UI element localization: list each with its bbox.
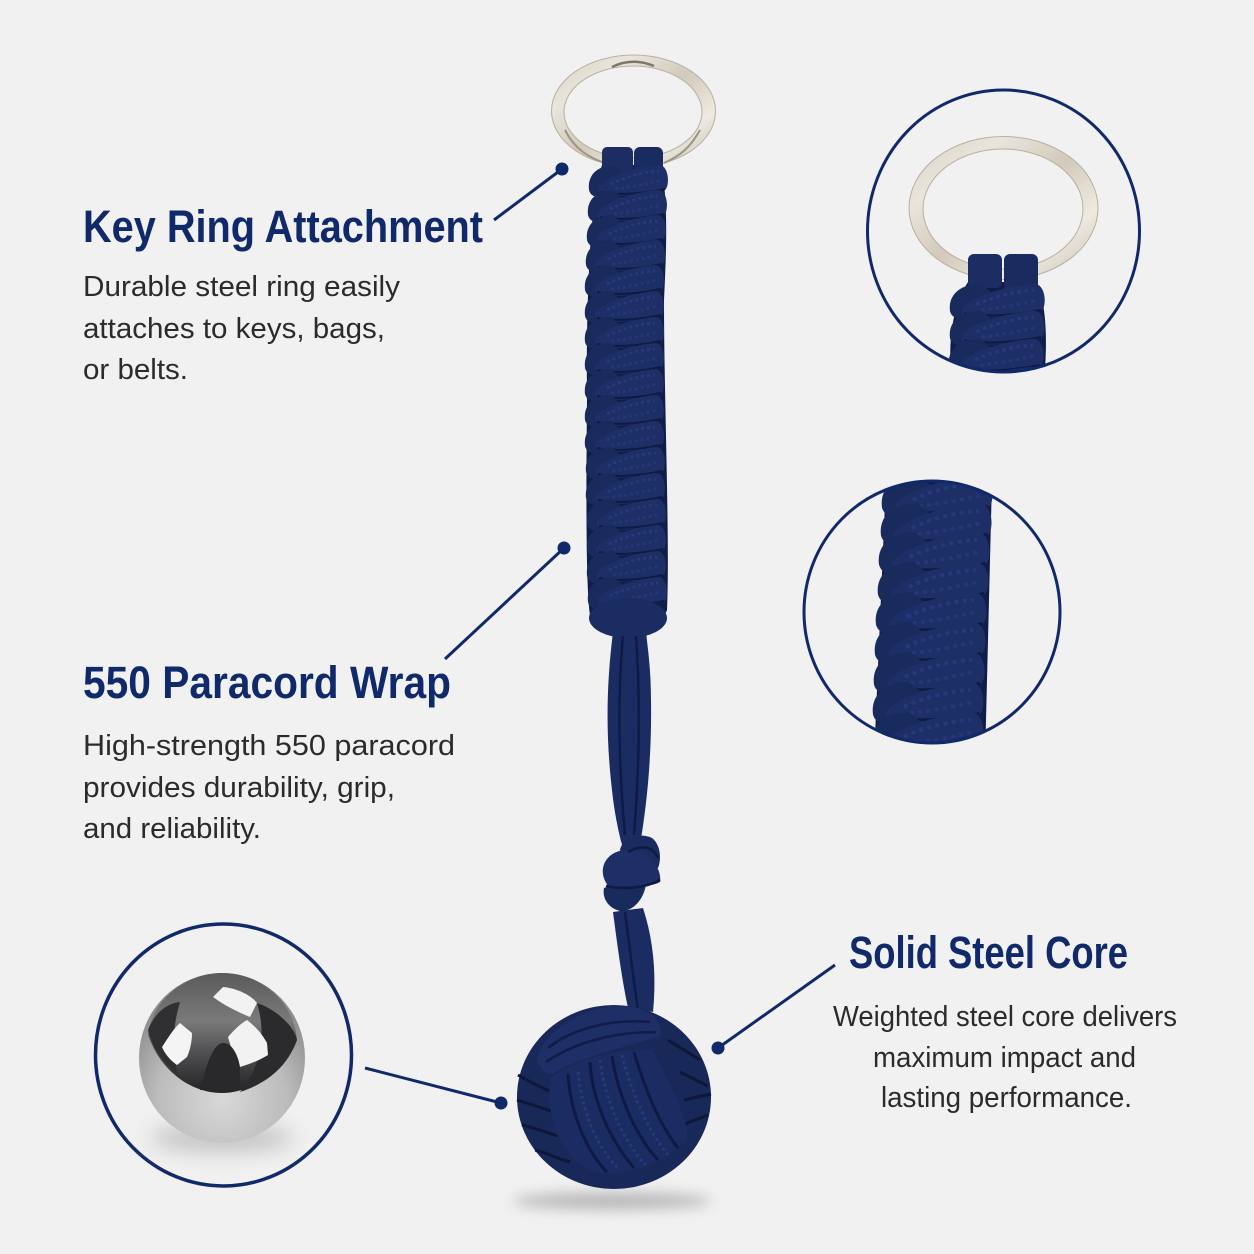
description: High-strength 550 paracord bbox=[83, 730, 455, 762]
detail circle: paracord wrap bbox=[804, 475, 1060, 760]
description: provides durability, grip, bbox=[83, 772, 395, 804]
steel ball bbox=[139, 973, 305, 1152]
callout: key ring attachment bbox=[83, 162, 568, 386]
description: lasting performance. bbox=[881, 1082, 1132, 1114]
loose cords bbox=[608, 632, 654, 1012]
callout: 550 paracord wrap bbox=[83, 542, 570, 845]
floor shadow bbox=[512, 1193, 712, 1209]
heading: Key Ring Attachment bbox=[83, 201, 483, 252]
leader line bbox=[365, 1068, 508, 1110]
description: Weighted steel core delivers bbox=[833, 1001, 1177, 1033]
heading: 550 Paracord Wrap bbox=[83, 657, 451, 708]
description: attaches to keys, bags, bbox=[83, 313, 385, 345]
detail circle: steel ball core bbox=[96, 924, 508, 1186]
braided paracord wrap bbox=[585, 147, 668, 638]
leader line bbox=[445, 542, 570, 659]
detail circle: key ring bbox=[868, 90, 1140, 402]
leader line bbox=[494, 162, 568, 220]
callout: solid steel core bbox=[712, 927, 1177, 1114]
heading: Solid Steel Core bbox=[849, 927, 1128, 978]
description: and reliability. bbox=[83, 813, 261, 845]
small knot bbox=[603, 836, 660, 911]
description: Durable steel ring easily bbox=[83, 271, 401, 303]
product: paracord keychain bbox=[512, 55, 716, 1209]
description bbox=[83, 730, 455, 845]
key ring bbox=[552, 55, 716, 167]
description: or belts. bbox=[83, 354, 188, 386]
description bbox=[83, 271, 401, 386]
description: maximum impact and bbox=[873, 1042, 1136, 1074]
description bbox=[833, 1001, 1177, 1114]
monkey fist ball bbox=[512, 1005, 712, 1209]
leader line bbox=[712, 965, 835, 1054]
